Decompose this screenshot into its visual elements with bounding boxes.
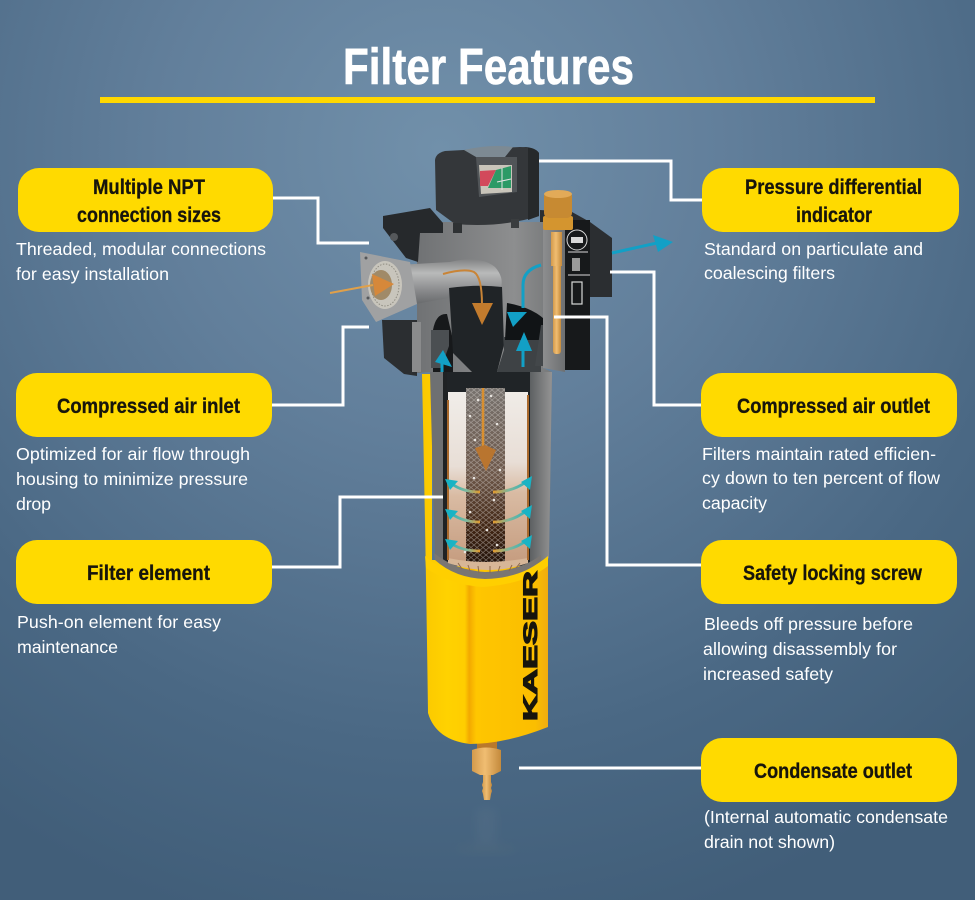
- callout: compressed air inlet: housing to minimize pressure: [16, 469, 248, 489]
- air flow inside element: [445, 380, 532, 551]
- air flow arrows: [330, 235, 673, 372]
- callout: compressed air outlet: cy down to ten percent of flow: [702, 468, 940, 488]
- warning label panel: [565, 220, 590, 370]
- callout: compressed air inlet: Compressed air inlet: [57, 395, 240, 418]
- callout: pressure differential indicator: Standard on particulate and: [704, 239, 923, 259]
- inlet arrow: [330, 274, 394, 296]
- callout: multiple NPT connection sizes: Threaded, modular connections: [16, 239, 266, 259]
- KAESER brand text: KAESER: [520, 571, 542, 721]
- bottom rim of bowl interior: [434, 553, 541, 579]
- callout: condensate outlet: drain not shown): [704, 832, 835, 852]
- central dark inlet tube: [447, 286, 530, 392]
- callout: multiple NPT connection sizes: for easy installation: [16, 264, 169, 284]
- callout: filter element: [16, 540, 272, 657]
- callout: filter element: Filter element: [87, 562, 210, 585]
- callout: filter element: maintenance: [17, 637, 118, 657]
- callout: safety locking screw: increased safety: [703, 664, 833, 684]
- callout: condensate outlet: (Internal automatic condensate: [704, 807, 948, 827]
- callout: safety locking screw: Bleeds off pressure before: [704, 614, 913, 634]
- callout: compressed air outlet: [701, 373, 957, 513]
- outlet cavity: [497, 303, 549, 372]
- title: Filter Features: [343, 38, 634, 95]
- callout: pressure differential indicator: [702, 168, 959, 283]
- callout: compressed air outlet: Compressed air outlet: [737, 395, 930, 418]
- callout: multiple NPT connection sizes: Multiple NPT: [93, 176, 205, 199]
- title: [100, 38, 875, 103]
- callout: compressed air inlet: [16, 373, 272, 514]
- drain fitting: [472, 740, 501, 800]
- callout: safety locking screw: Safety locking screw: [743, 562, 923, 585]
- outlet arrow: [612, 235, 673, 253]
- callout: pressure differential indicator: coalescing filters: [704, 263, 835, 283]
- left cavity and seal: [431, 314, 453, 372]
- callout: multiple NPT connection sizes: [16, 168, 273, 284]
- callout: compressed air outlet: Filters maintain rated efficien-: [702, 444, 936, 464]
- inlet pipe passage: [397, 259, 502, 305]
- contaminant particles: [464, 395, 501, 553]
- cut edge of yellow housing: [425, 556, 548, 587]
- callout: safety locking screw: allowing disassembly for: [703, 639, 897, 659]
- callout: compressed air inlet: Optimized for air flow through: [16, 444, 250, 464]
- callout: multiple NPT connection sizes: connection sizes: [77, 204, 221, 227]
- reflection of filter: [454, 808, 518, 852]
- filter bowl: yellow housing: [422, 374, 548, 744]
- left dark housing blocks: [382, 208, 443, 376]
- filter illustration: [330, 146, 673, 852]
- callout: compressed air outlet: capacity: [702, 493, 767, 513]
- bowl cut-away walls: [430, 372, 552, 570]
- filter element: [447, 380, 529, 573]
- safety locking screw: [543, 190, 573, 354]
- right dark housing block: [540, 210, 612, 370]
- callout: pressure differential indicator: Pressure differential: [745, 176, 922, 199]
- callout: filter element: Push-on element for easy: [17, 612, 221, 632]
- callout: pressure differential indicator: indicator: [796, 204, 872, 227]
- callout: safety locking screw: [701, 540, 957, 684]
- leader lines: [272, 161, 702, 768]
- inlet flange and threads: [360, 252, 417, 322]
- right grey strip: [543, 225, 565, 372]
- gauge window: [476, 157, 517, 197]
- grey manifold body: [417, 222, 552, 373]
- blue outlet flow: [435, 265, 541, 372]
- callout: condensate outlet: [701, 738, 957, 852]
- pressure differential indicator cap: [435, 146, 539, 233]
- orange flow curve: [443, 270, 493, 325]
- callout: condensate outlet: Condensate outlet: [754, 760, 912, 783]
- callout: compressed air inlet: drop: [16, 494, 51, 514]
